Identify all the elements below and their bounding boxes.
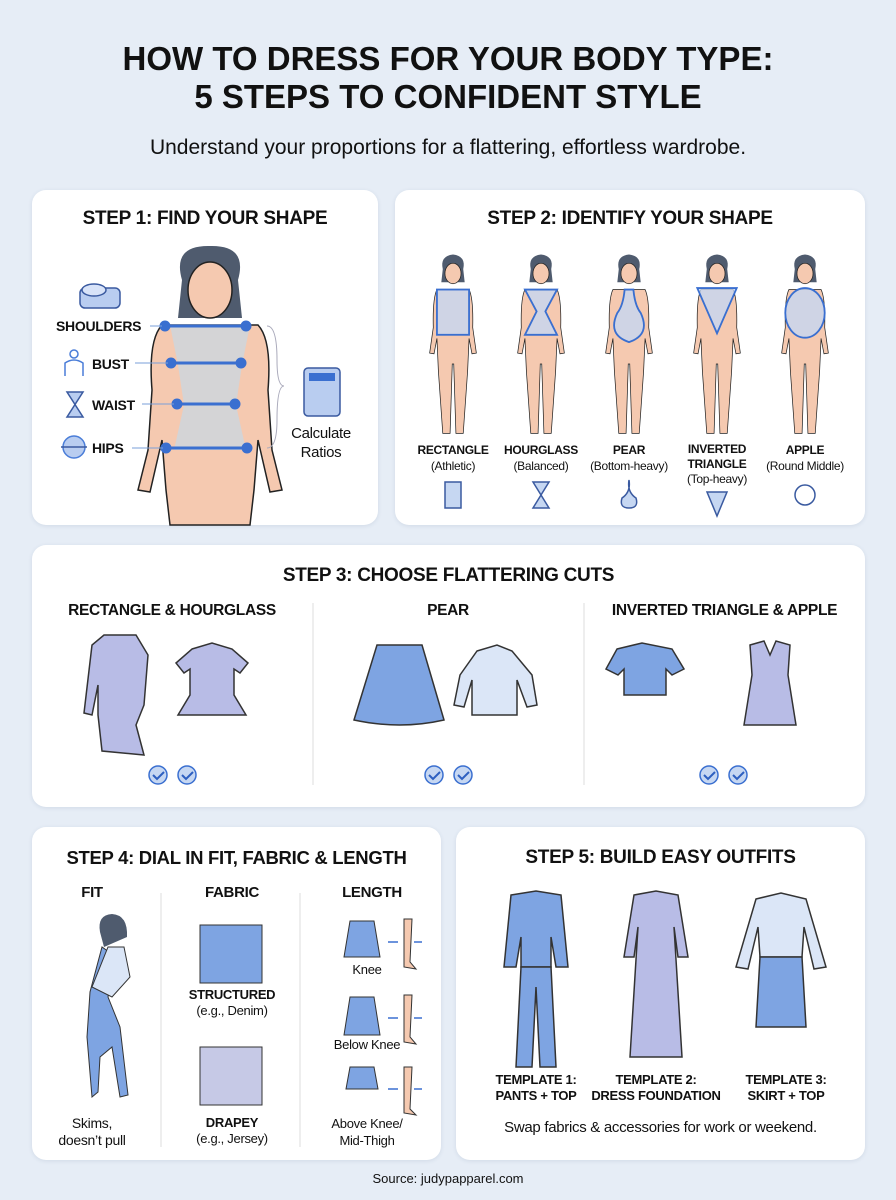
body shape figures bbox=[429, 254, 829, 518]
panel: step 5: TEMPLATE 3: bbox=[746, 1072, 826, 1087]
panel: step 4: Below Knee bbox=[334, 1037, 400, 1052]
footer note: Swap fabrics & accessories for work or weekend. bbox=[504, 1119, 817, 1136]
panel: step 2: TRIANGLE bbox=[688, 457, 746, 471]
heading step 5: STEP 5: BUILD EASY OUTFITS bbox=[525, 847, 796, 868]
source: Source: judypapparel.com bbox=[372, 1171, 524, 1186]
panel: step 5: TEMPLATE 2: bbox=[616, 1072, 696, 1087]
length captions: Knee bbox=[352, 962, 382, 977]
panel: step 1: BUST bbox=[92, 356, 129, 372]
title: HOW TO DRESS FOR YOUR BODY TYPE: bbox=[123, 40, 773, 77]
panel: step 4: Above Knee/ bbox=[331, 1116, 403, 1131]
panel: step 3: INVERTED TRIANGLE & APPLE bbox=[612, 602, 837, 619]
heading step 1: STEP 1: FIND YOUR SHAPE bbox=[83, 208, 327, 229]
title: 5 STEPS TO CONFIDENT STYLE bbox=[194, 78, 702, 115]
panel: step 4: LENGTH bbox=[342, 884, 402, 901]
structured caption bbox=[189, 987, 275, 1018]
template labels bbox=[495, 1072, 577, 1103]
title bbox=[123, 40, 773, 115]
panel: step 4: FABRIC bbox=[205, 884, 259, 901]
panel: step 1: WAIST bbox=[92, 397, 135, 413]
shape labels: RECTANGLE bbox=[417, 443, 489, 457]
drapey caption: (e.g., Jersey) bbox=[196, 1131, 268, 1146]
subtitle: Understand your proportions for a flattering, effortless wardrobe. bbox=[150, 136, 746, 159]
panel: step 4: Mid-Thigh bbox=[339, 1133, 395, 1148]
panel: step 1: HIPS bbox=[92, 440, 123, 456]
template labels: TEMPLATE 1: bbox=[496, 1072, 576, 1087]
shape labels bbox=[417, 443, 489, 473]
drapey caption bbox=[196, 1115, 268, 1146]
heading step 4: STEP 4: DIAL IN FIT, FABRIC & LENGTH bbox=[66, 847, 407, 868]
heading step 2: STEP 2: IDENTIFY YOUR SHAPE bbox=[487, 208, 773, 229]
drapey caption: DRAPEY bbox=[206, 1115, 258, 1130]
panel: step 3: PEAR bbox=[427, 602, 469, 619]
panel: step 2: HOURGLASS bbox=[504, 443, 578, 457]
calculate ratios: Calculate Ratios bbox=[291, 425, 351, 461]
structured caption: (e.g., Denim) bbox=[196, 1003, 268, 1018]
panel: step 2: (Balanced) bbox=[513, 459, 569, 473]
panel: step 5: SKIRT + TOP bbox=[747, 1088, 824, 1103]
panel: step 2: INVERTED bbox=[688, 442, 746, 456]
panel: step 2: (Bottom-heavy) bbox=[590, 459, 668, 473]
column headings: RECTANGLE & HOURGLASS bbox=[68, 602, 276, 619]
panel: step 2 bbox=[395, 190, 865, 525]
shape labels: (Athletic) bbox=[431, 459, 475, 473]
panel: step 4 bbox=[32, 827, 441, 1160]
panel: step 2: (Top-heavy) bbox=[687, 472, 747, 486]
panel: step 2: (Round Middle) bbox=[766, 459, 844, 473]
fit caption: Skims, bbox=[72, 1115, 112, 1131]
figure with measurement lines bbox=[61, 246, 341, 526]
panel: step 5 bbox=[456, 827, 865, 1160]
column headings: FIT bbox=[81, 884, 103, 901]
panel: step 2: PEAR bbox=[613, 443, 645, 457]
garments bbox=[83, 603, 797, 785]
structured caption: STRUCTURED bbox=[189, 987, 275, 1002]
panel: step 5: DRESS FOUNDATION bbox=[591, 1088, 721, 1103]
template labels: PANTS + TOP bbox=[495, 1088, 577, 1103]
fit caption bbox=[58, 1115, 126, 1148]
measurement labels: SHOULDERS bbox=[56, 318, 141, 334]
panel: step 3 bbox=[32, 545, 865, 807]
heading step 3: STEP 3: CHOOSE FLATTERING CUTS bbox=[283, 565, 614, 586]
fit caption: doesn’t pull bbox=[58, 1132, 126, 1148]
panel: step 1 bbox=[32, 190, 378, 525]
panel: step 2: APPLE bbox=[786, 443, 824, 457]
